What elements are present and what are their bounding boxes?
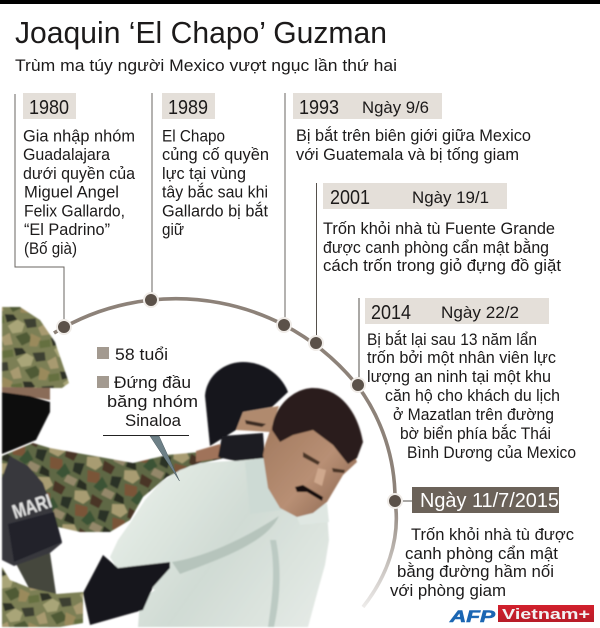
- shirt far collar: [297, 503, 329, 525]
- panel: 1980: “El Padrino”: [24, 221, 110, 239]
- panel: 2014: Bị bắt lại sau 13 năm lẩn: [367, 330, 537, 349]
- panel: 2014: Ngày 22/2: [441, 303, 519, 322]
- panel: 1980: Guadalajara: [23, 146, 111, 164]
- timeline arc: [54, 299, 396, 607]
- timeline dots: [57, 293, 402, 508]
- panel: 2001: [323, 183, 561, 275]
- bare wrist of soldier: [196, 444, 220, 462]
- panel: 1989: củng cố quyền: [162, 146, 269, 164]
- hooded officer: [205, 362, 288, 446]
- panel: 2015: [390, 487, 574, 600]
- panel: 2001: được canh phòng cẩn mật bằng: [323, 238, 549, 257]
- callout: age and role: băng nhóm: [107, 393, 198, 411]
- panel: 1989: [162, 93, 269, 239]
- panel: 2014: lượng an ninh tại một khu: [367, 368, 551, 386]
- subtitle: Trùm ma túy người Mexico vượt ngục lần thứ hai: [15, 56, 397, 75]
- leader line 1989: [151, 93, 153, 298]
- right brow and eye: [332, 468, 345, 473]
- panel: 2014: trốn bởi một nhân viên lực: [367, 349, 556, 367]
- leader line 2014: [358, 298, 360, 384]
- leader line 1993: [284, 93, 286, 324]
- leader line 2001: [316, 183, 318, 342]
- panel: 2014: bờ biển phía bắc Thái: [400, 424, 551, 443]
- soldier lower body camouflage: [2, 567, 83, 627]
- logo: AFP: AFP: [449, 607, 496, 626]
- soldier tactical vest: [2, 456, 62, 566]
- head of Guzman: [263, 388, 363, 517]
- soldier helmet: [2, 307, 69, 388]
- panel: 2014: căn hộ cho khách du lịch: [385, 387, 560, 405]
- shirt of Guzman: [110, 458, 329, 627]
- callout: age and role: Đứng đầu: [114, 374, 191, 392]
- soldier arm and torso camouflage: [2, 443, 224, 532]
- panel: 2014: [365, 298, 576, 462]
- panel: 2014: Bình Dương của Mexico: [407, 444, 576, 462]
- panel: 1989: El Chapo: [162, 128, 225, 146]
- panel: 1993: [293, 93, 531, 164]
- shirt shadow fold: [172, 516, 279, 574]
- panel: 2001: 2001: [330, 187, 370, 209]
- panel: 1989: 1989: [168, 97, 208, 119]
- panel: 1993: với Guatemala và bị tống giam: [296, 146, 519, 164]
- hair: [272, 388, 363, 464]
- leader line 2015: [395, 500, 412, 502]
- panel: 1993: 1993: [299, 97, 339, 119]
- panel: 1980: Gia nhập nhóm: [23, 128, 135, 146]
- shirt lower fold: [268, 540, 280, 627]
- panel: 2001: Ngày 19/1: [412, 188, 489, 207]
- callout: age and role: 58 tuổi: [115, 346, 168, 364]
- panel: 2014: ở Mazatlan trên đường: [393, 406, 554, 424]
- callout: age and role: [97, 346, 198, 481]
- lower glove: [83, 555, 170, 625]
- panel: 1980: [23, 93, 136, 258]
- panel: 2014: 2014: [371, 302, 411, 324]
- title: Joaquin ‘El Chapo’ Guzman: [15, 15, 387, 50]
- soldier trousers: [14, 553, 56, 594]
- panel: 1993: Bị bắt trên biên giới giữa Mexico: [296, 126, 531, 145]
- panel: 2015: canh phòng cẩn mật: [405, 545, 558, 563]
- top black bar: [0, 0, 600, 4]
- panel: 2001: cách trốn trong giỏ đựng đồ giặt: [323, 257, 561, 275]
- panel: 2015: bằng đường hầm nối: [397, 562, 554, 581]
- nose highlight: [314, 468, 326, 486]
- panel: 1993: Ngày 9/6: [362, 98, 429, 117]
- panel: 2015: với phòng giam: [390, 582, 506, 600]
- shirt collar: [245, 458, 282, 514]
- panel: 2015: Ngày 11/7/2015: [420, 490, 559, 512]
- panel: 1980: Felix Gallardo,: [24, 203, 125, 221]
- panel: 1980: Miguel Angel: [24, 184, 119, 202]
- left brow and eye: [303, 452, 320, 465]
- panel: 1989: lực tại vùng: [162, 165, 246, 183]
- panel: 1980: 1980: [29, 97, 69, 119]
- logo: Vietnam+: [498, 605, 594, 623]
- panel: 2015: Trốn khỏi nhà tù được: [411, 526, 574, 544]
- panel: 1989: giữ: [162, 221, 184, 239]
- hand on neck glove: [218, 433, 265, 461]
- panel: 1980: dưới quyền của: [23, 165, 136, 183]
- soldier face mask: [2, 392, 50, 454]
- soldier forehead: [2, 387, 50, 400]
- leader line 1980: [15, 94, 64, 325]
- callout: age and role: Sinaloa: [125, 412, 182, 430]
- panel: 2001: Trốn khỏi nhà tù Fuente Grande: [323, 220, 555, 238]
- panel: 1980: (Bố già): [24, 240, 77, 258]
- panel: 1989: tây bắc sau khi: [162, 183, 268, 202]
- moustache: [295, 485, 323, 501]
- photo: arrest scene: [2, 307, 363, 627]
- panel: 1989: Gallardo bị bắt: [162, 202, 268, 221]
- face: [263, 410, 357, 517]
- soldier tactical vest: MARI: [10, 490, 55, 524]
- logo: Vietnam+: Vietnam+: [502, 606, 590, 623]
